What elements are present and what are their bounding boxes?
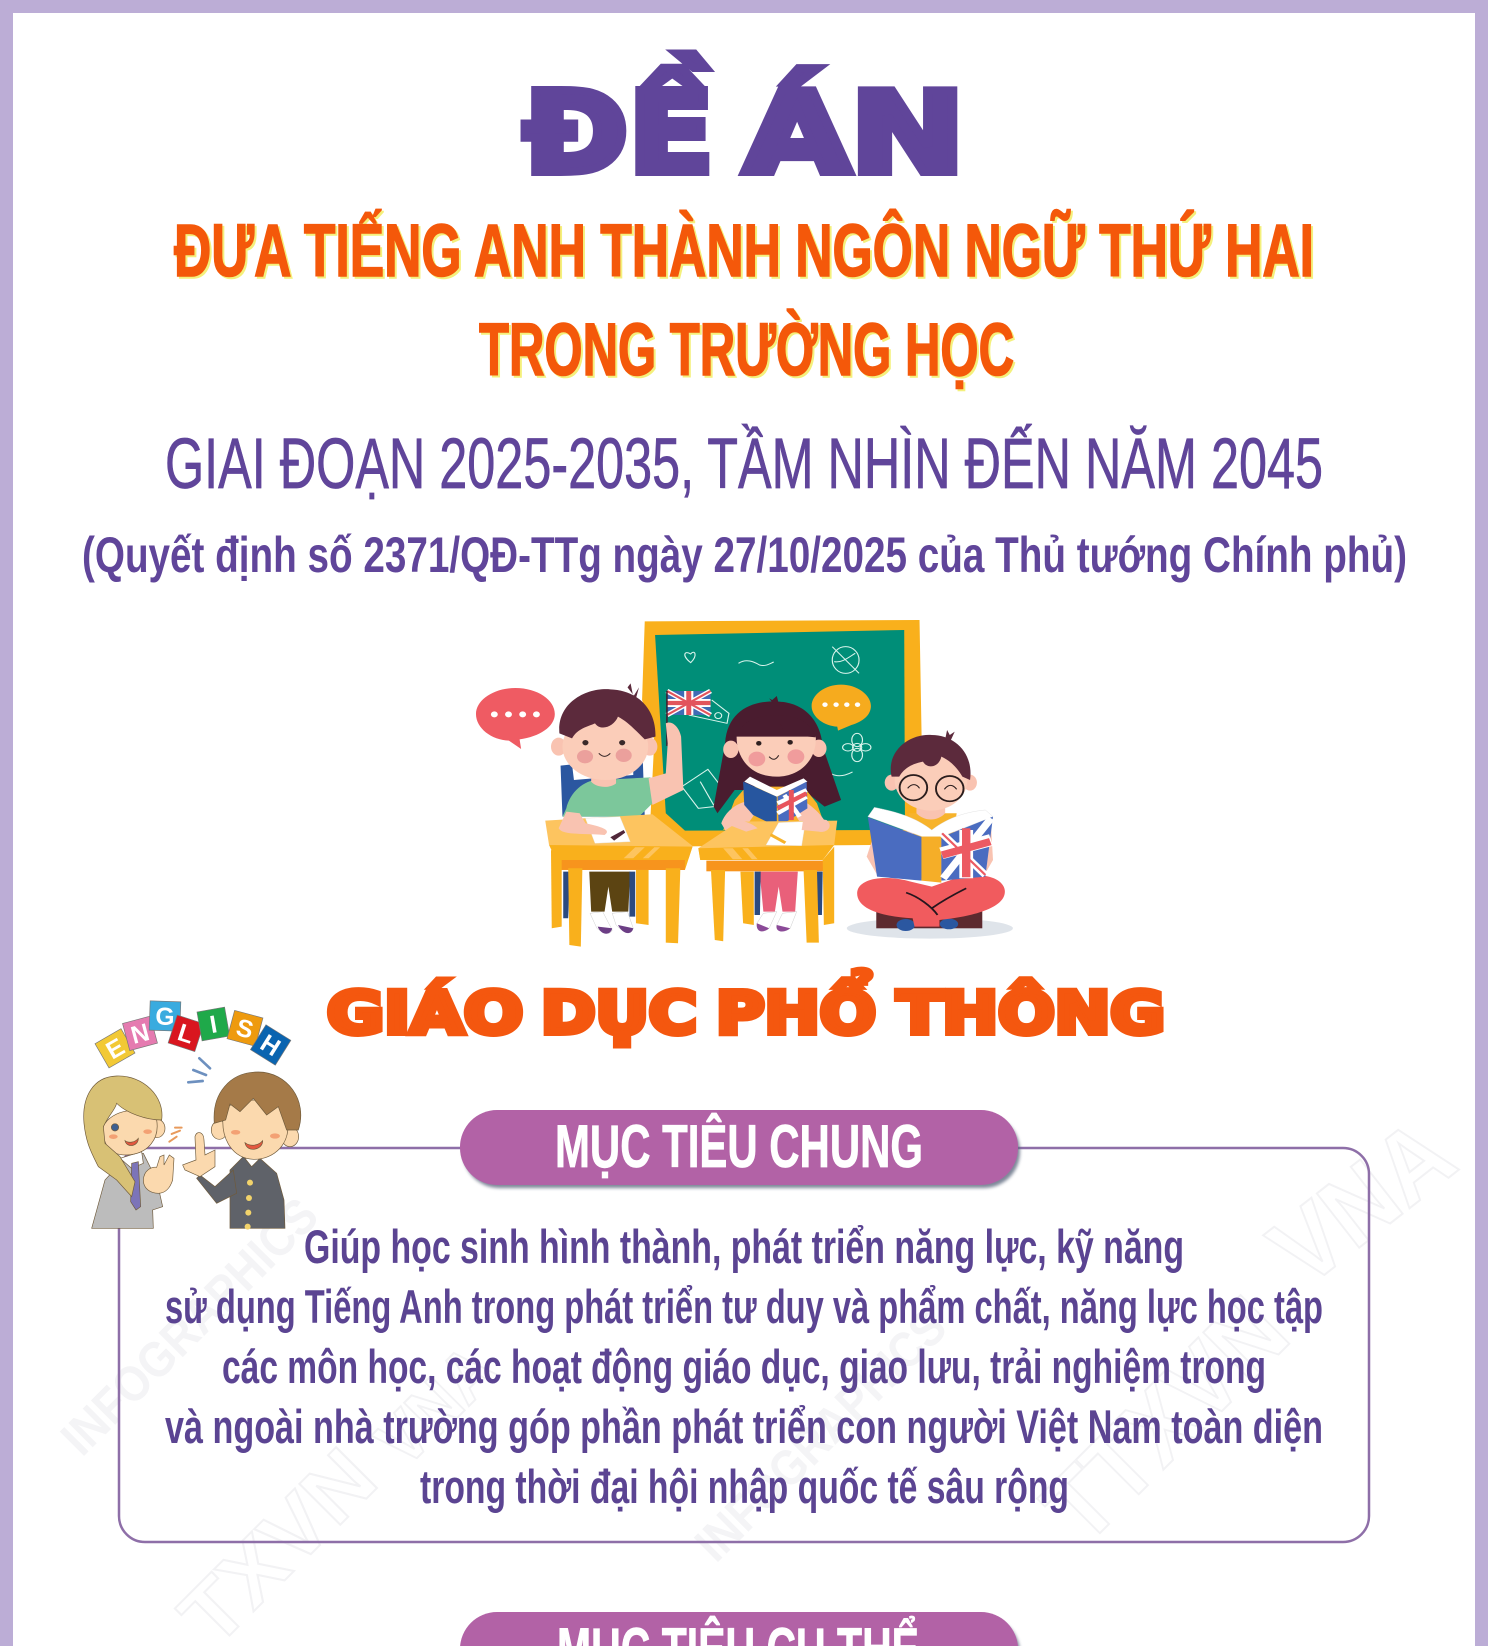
desk left	[545, 812, 693, 947]
boy with raised hand	[551, 683, 683, 934]
infographic canvas: INFOGRAPHICS	[684, 1299, 957, 1572]
infographic canvas: INFOGRAPHICS	[50, 1187, 329, 1466]
letter blocks: S	[233, 1014, 256, 1045]
letter blocks: E	[102, 1034, 129, 1065]
letter blocks: N	[128, 1019, 152, 1050]
body text: trong thời đại hội nhập quốc tế sâu rộng	[420, 1460, 1069, 1513]
icon: British flag	[666, 691, 711, 746]
title: ĐỀ ÁN: ĐỀ	[523, 53, 714, 199]
section heading: GIÁO DỤC PHỔ THÔNG	[327, 969, 1165, 1047]
girl with book	[714, 696, 841, 932]
heading: project name: TRONG TRƯỜNG HỌC	[479, 308, 1014, 391]
section heading: GIÁO DỤC PHỔ THÔNG: PHỔ	[716, 969, 876, 1047]
panel border	[119, 1148, 1369, 1542]
section heading: GIÁO DỤC PHỔ THÔNG: THÔNG	[897, 978, 1165, 1047]
heading: project name: TRONG TRƯỜNG HỌC	[481, 310, 1016, 393]
icon: chalkboard	[642, 620, 923, 847]
title: ĐỀ ÁN: ÁN	[744, 67, 965, 199]
boy with glasses reading	[847, 730, 1013, 939]
illustration: pupils in classroom	[476, 620, 1013, 947]
blonde girl	[84, 1076, 174, 1228]
infographic canvas: VNA	[360, 1330, 511, 1481]
section heading: GIÁO DỤC PHỔ THÔNG: GIÁO	[327, 978, 523, 1047]
pill: MỤC TIÊU CHUNG: MỤC TIÊU CHUNG	[555, 1113, 923, 1180]
pill: MỤC TIÊU CHUNG	[460, 1110, 1020, 1188]
desk right	[698, 817, 837, 943]
infographic canvas: TTXVN	[1021, 1276, 1309, 1564]
heading: project name	[174, 209, 1316, 393]
icon: yellow speech bubble	[812, 685, 871, 731]
body text	[165, 1220, 1323, 1513]
letter blocks	[95, 1001, 291, 1069]
letter blocks: L	[174, 1019, 197, 1050]
icon: red speech bubble	[476, 688, 555, 749]
letter blocks: H	[255, 1030, 285, 1062]
section heading: GIÁO DỤC PHỔ THÔNG: DỤC	[541, 979, 697, 1047]
brown hair boy	[183, 1072, 301, 1230]
illustration: English students	[84, 1001, 301, 1230]
title: ĐỀ ÁN	[523, 53, 965, 199]
pill: MỤC TIÊU CỤ THỂ	[460, 1612, 1020, 1646]
letter blocks: I	[208, 1011, 219, 1039]
panel: mục tiêu chung	[119, 1148, 1369, 1542]
letter blocks: G	[155, 1003, 175, 1031]
infographic canvas: VNA	[1250, 1097, 1475, 1307]
